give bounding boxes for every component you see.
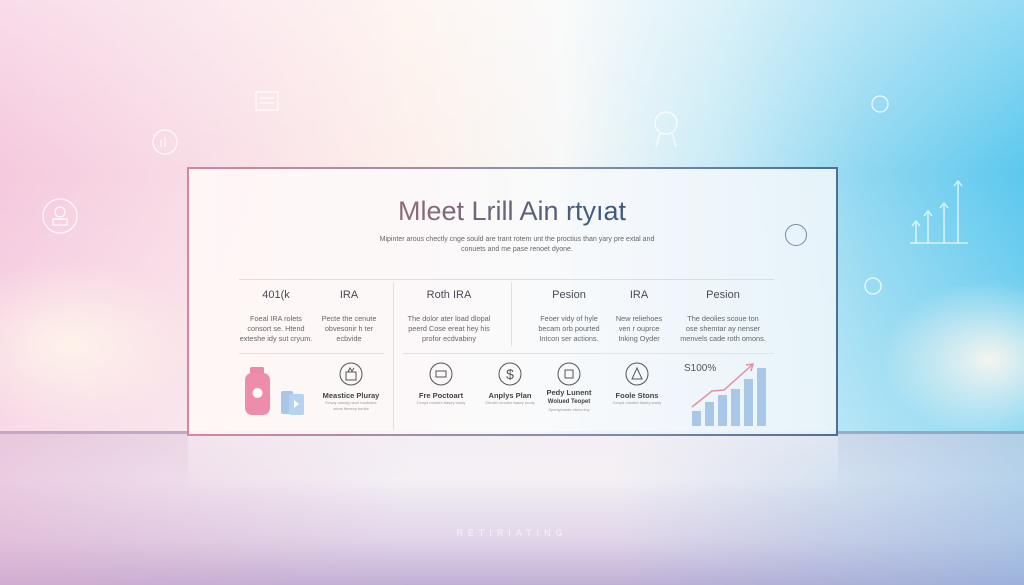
main panel: obvesonir h ter: [325, 324, 373, 333]
feature: Pedy Lunent: [546, 362, 592, 412]
feature: Pedy Lunent: Pedy Lunent: [546, 388, 592, 397]
panel reflection: [188, 436, 838, 496]
feature: Anplys Plan: Anplys Plan: [489, 391, 531, 400]
feature: Foole Stons: [612, 362, 662, 405]
decorative circle icon: [785, 224, 807, 246]
main panel: Pesion: [706, 289, 740, 301]
feature: Anplys Plan: Cleolel ronoten tlasey toudy: [485, 400, 535, 405]
main panel: IRA: [340, 289, 358, 301]
feature: Fre Poctoart: Fre Poctoart: [419, 391, 463, 400]
main panel: Pesion: [552, 289, 586, 301]
main panel: New reliehoes: [616, 314, 662, 323]
feature: Anplys Plan: [485, 362, 535, 405]
column text: [240, 314, 312, 343]
icon: chart circle: [153, 130, 177, 154]
main panel: Feoer vidy of hyle: [540, 314, 598, 323]
bar chart: [684, 363, 766, 426]
floating icons: [42, 92, 968, 295]
feature: Meastice Pluray: Ensdy onsolg ravel toudsdes ofons tteceny beoke: [325, 400, 377, 410]
background haze top: [0, 0, 1024, 433]
icon: person circle: [43, 199, 77, 233]
feature: Pedy Lunent: Wolued Teopet: [548, 399, 590, 405]
column headings: 401(k: [262, 289, 290, 301]
main panel: The dolor ater load dlopal: [408, 314, 490, 323]
feature: Meastice Pluray: [323, 362, 380, 411]
reflective floor: [0, 433, 1024, 585]
title: [189, 196, 835, 227]
clouds: [0, 260, 200, 430]
subtitle: Mipinter arous chectly cnge sould are trant rotem unt the proctius than yary pre extal and conuets and me pase renoet dyone.: [380, 236, 654, 253]
feature: Foole Stons: Cenyd ronoten tlasey toudy: [613, 400, 661, 405]
main panel: ecbvide: [336, 334, 362, 343]
feature: Fre Poctoart: [416, 362, 466, 405]
title: Mleet Lrill Ain rtyıat: [398, 196, 626, 226]
main panel: profor ecdvabiny: [422, 334, 476, 343]
main panel: Roth IRA: [427, 289, 471, 301]
icon: coin: [872, 96, 888, 112]
main panel: Inking Oyder: [618, 334, 660, 343]
column text: consort se. Htend: [247, 324, 305, 333]
column text: Foeal IRA rolets: [250, 314, 302, 323]
main panel: IRA: [630, 289, 648, 301]
main panel: Pecte the cenute: [322, 314, 376, 323]
feature: Anplys Plan: $: [506, 366, 514, 382]
bar chart: S100%: [684, 363, 716, 374]
main panel: [187, 167, 838, 436]
icon: note: [256, 92, 278, 110]
feature: Pedy Lunent: Spenlyhnsde ofons tiny: [548, 407, 590, 412]
feature: Fre Poctoart: Cenyd ronoten tlasey toudy: [417, 400, 465, 405]
main panel: menvels cade roth omons.: [680, 334, 766, 343]
feature: Foole Stons: Foole Stons: [616, 391, 658, 400]
icon: arrows: [910, 181, 968, 243]
footer label: RETIRIATING: [456, 528, 568, 538]
main panel: The deolies scoue ton: [687, 314, 759, 323]
main panel: ose shemtar ay nenser: [686, 324, 760, 333]
main panel: Intcon ser actions.: [539, 334, 599, 343]
main panel: becam orb pourted: [538, 324, 600, 333]
main panel: peerd Cose ereat hey his: [408, 324, 490, 333]
divider lines: [239, 279, 774, 280]
icon: award: [655, 112, 677, 147]
column text: exteshe idy sut cryum.: [240, 334, 312, 343]
icon: pink jar and blue cards: [245, 367, 304, 415]
main panel: ven r ouprce: [619, 324, 659, 333]
feature: Meastice Pluray: Meastice Pluray: [323, 391, 379, 400]
